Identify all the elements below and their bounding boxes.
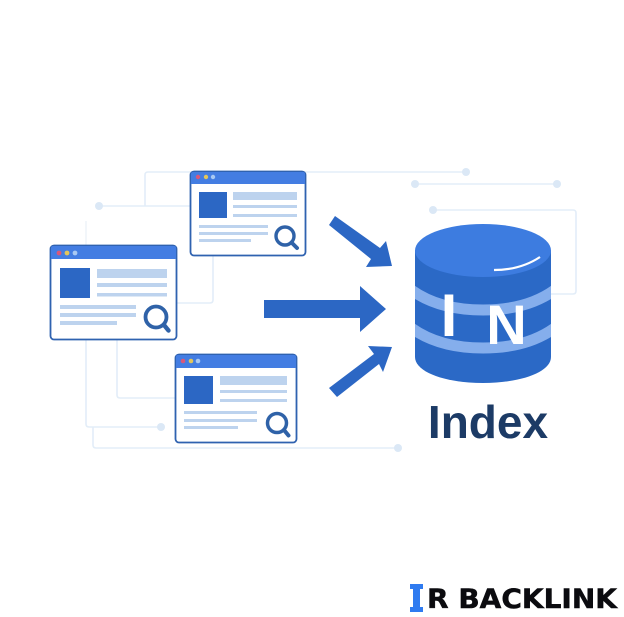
logo text: R BACKLINK [427,584,618,615]
icon: magnifier, bottom window [268,414,288,436]
letter N: N [486,293,527,356]
letter I: I [441,282,457,349]
title bar: top window [191,172,305,184]
arrow: middle, to database [264,286,386,332]
window controls: left window [57,251,77,255]
image placeholder: bottom window [184,376,213,404]
label: Index: Index [428,396,548,448]
icon: magnifier, top window [276,227,297,248]
cylinder bands [410,289,556,348]
title bar: bottom window [176,355,296,368]
image placeholder: left window [60,268,90,298]
window controls: bottom window [181,359,200,363]
text lines: bottom window [184,376,287,429]
browser window: top [190,172,306,256]
database cylinder [410,224,556,383]
browser window: bottom [176,354,296,442]
window controls: top window [196,175,215,179]
image placeholder: top window [199,192,227,218]
text lines: left window [60,269,167,325]
highlight [494,257,540,270]
arrow: bottom, to database [329,346,392,397]
logo mark: blue I [410,584,423,612]
cylinder top [415,224,551,277]
title bar: left window [51,246,176,259]
infographic: pages flowing into index [50,168,618,612]
logo: IR BACKLINK [410,584,618,615]
arrow: top, to database [329,216,392,267]
text lines: top window [199,192,297,242]
icon: magnifier, left window [146,306,168,330]
connector network [86,168,576,452]
browser window: left [50,246,176,340]
